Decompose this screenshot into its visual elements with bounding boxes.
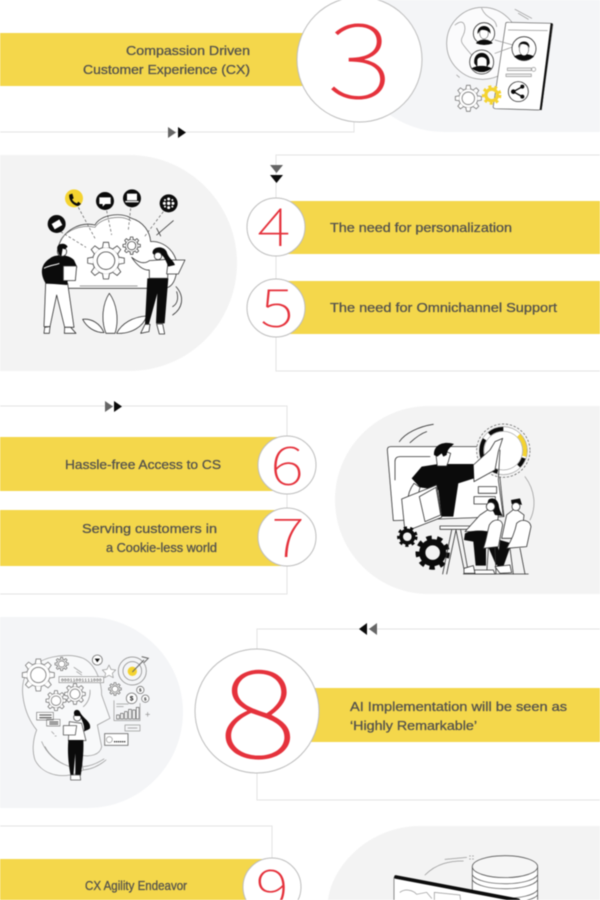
bar: item 3 heading band xyxy=(0,33,310,86)
number badge: 4 xyxy=(247,186,305,262)
heading: item 9: CX Agility Endeavor xyxy=(85,879,187,893)
heading: item 3: Compassion Driven xyxy=(126,43,250,58)
panel: items 6-7 illustration background xyxy=(335,406,600,594)
heading: item 3 xyxy=(83,43,250,77)
heading: item 8: ‘Highly Remarkable’ xyxy=(350,718,477,733)
illustration: head with gears, target and analyst: 00011001111000 xyxy=(61,678,102,684)
number badge: 8: 8 xyxy=(219,616,297,794)
heading: item 7: a Cookie-less world xyxy=(106,540,217,555)
panel: item 8 illustration background xyxy=(0,617,183,808)
heading: item 5: The need for Omnichannel Support xyxy=(330,300,557,315)
heading: item 8: AI Implementation will be seen as xyxy=(350,699,567,714)
illustration: head with gears, target and analyst: $ xyxy=(144,696,147,701)
number badge: 7 xyxy=(258,494,316,573)
heading: item 4: The need for personalization xyxy=(330,220,512,235)
number badge: 5: 5 xyxy=(260,267,294,343)
arrow: item 3 forward xyxy=(168,127,186,138)
number badge: 7: 7 xyxy=(272,494,304,573)
bar: item 8 heading band xyxy=(257,688,600,742)
number badge: 4: 4 xyxy=(258,186,290,262)
arrow: items 4-5 down xyxy=(270,165,283,183)
arrow: items 6-7 forward xyxy=(105,401,122,412)
connector: item 8 frame xyxy=(257,629,600,800)
bar: item 4 heading band xyxy=(276,201,600,254)
connector: items 6-7 frame xyxy=(0,406,287,594)
panel: items 4-5 illustration background xyxy=(0,155,237,371)
number badge: 6 xyxy=(258,422,316,501)
illustration: presenter with chart and team xyxy=(387,424,534,574)
connector: item 9 line xyxy=(0,826,272,862)
heading: item 7 xyxy=(82,521,217,555)
illustration: phone, globe and contacts xyxy=(447,7,553,111)
number badge: 9 xyxy=(243,845,301,900)
illustration: head with gears, target and analyst: $ xyxy=(130,696,134,703)
bar: item 9 heading band xyxy=(0,859,272,900)
panel: item 3 illustration background xyxy=(350,0,600,132)
number badge: 5 xyxy=(247,267,305,343)
arrow: item 8 back xyxy=(359,623,377,635)
illustration: head with gears, target and analyst xyxy=(22,655,150,780)
heading: item 7: Serving customers in xyxy=(82,521,217,536)
connector: item 3 line xyxy=(0,118,354,132)
bar: item 6 heading band xyxy=(0,437,287,491)
bar: item 5 heading band xyxy=(276,281,600,334)
heading: item 8 xyxy=(350,699,567,733)
connector: items 4-5 frame xyxy=(276,155,600,371)
number badge: 6: 6 xyxy=(270,422,304,501)
heading: item 6: Hassle-free Access to CS xyxy=(65,457,221,472)
illustration: head with gears, target and analyst: $ xyxy=(139,688,142,693)
number badge: 3 xyxy=(297,0,422,128)
heading: item 3: Customer Experience (CX) xyxy=(83,62,250,77)
illustration: team with cloud and channel icons xyxy=(42,189,185,334)
illustration: database and screen xyxy=(394,856,538,900)
number badge: 8 xyxy=(195,616,319,794)
panel: item 9 illustration background xyxy=(328,826,600,900)
bar: item 7 heading band xyxy=(0,510,287,566)
